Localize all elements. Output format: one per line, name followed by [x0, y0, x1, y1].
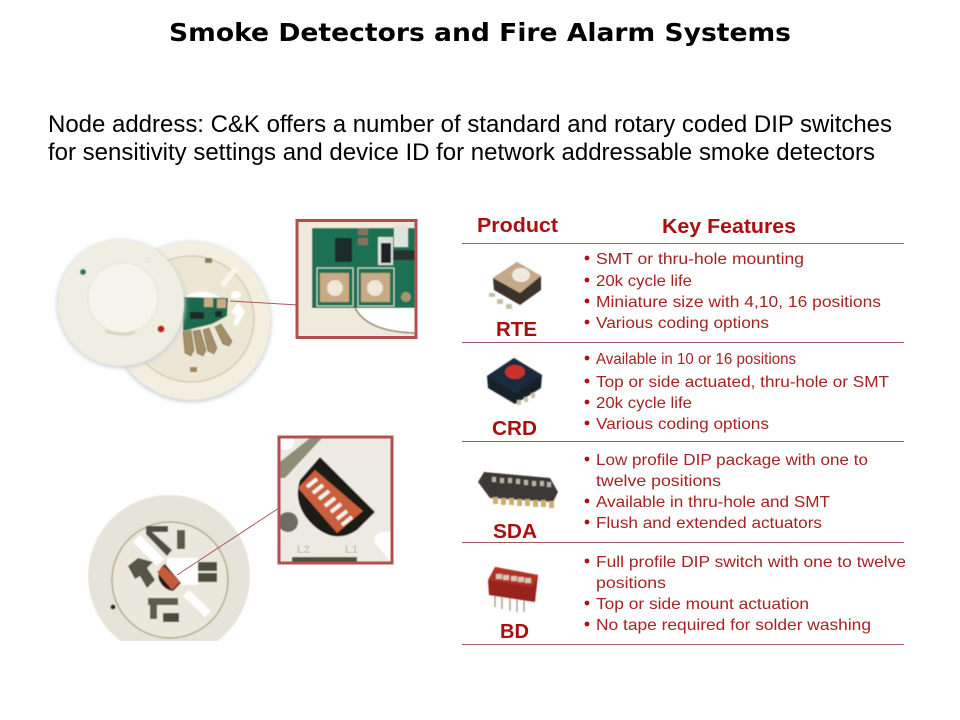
row: CRD: [487, 351, 890, 440]
features: RTE: Various coding options: [596, 315, 769, 332]
features: RTE: Miniature size with 4,10, 16 positions: [596, 294, 881, 311]
features: SDA: Flush and extended actuators: [596, 515, 822, 532]
row: RTE: [489, 251, 881, 341]
slots: [133, 535, 164, 566]
zoom inset 2: DIP switch: L1: [345, 544, 358, 556]
intro text: for sensitivity settings and device ID for network addressable smoke detectors: [48, 139, 875, 166]
base ring: [111, 242, 271, 402]
zoom inset 2: DIP switch: [278, 434, 392, 563]
circuit board: [183, 297, 228, 331]
icon: BD switch: [488, 567, 538, 612]
features: BD: positions: [596, 575, 666, 592]
icon: RTE switch: [489, 262, 541, 309]
features: SDA: [585, 452, 868, 532]
leader line 1: [230, 301, 298, 305]
title: Smoke Detectors and Fire Alarm Systems: [169, 18, 791, 47]
intro text: Node address: C&K offers a number of standard and rotary coded DIP switches: [48, 111, 892, 138]
photo: open smoke detector: [57, 240, 271, 402]
terminals: [146, 526, 172, 556]
table headers: [477, 214, 796, 238]
table row rules: [462, 244, 904, 644]
features: RTE: SMT or thru-hole mounting: [596, 251, 804, 268]
features: BD: Full profile DIP switch with one to twelve: [596, 554, 906, 571]
features: CRD: Various coding options: [596, 416, 769, 433]
label: RTE: RTE: [496, 318, 537, 341]
label: BD: BD: [500, 620, 529, 643]
features: RTE: [585, 251, 881, 332]
table headers: Key Features: [662, 215, 796, 238]
features: BD: Top or side mount actuation: [596, 596, 809, 613]
terminals: [183, 324, 232, 356]
zoom inset 1: rotary switches on board: [297, 220, 416, 338]
table headers: Product: [477, 214, 558, 237]
label: SDA: SDA: [493, 520, 537, 543]
features: RTE: 20k cycle life: [596, 273, 692, 290]
row: SDA: [478, 452, 868, 543]
icon: CRD switch: [487, 358, 542, 405]
features: BD: No tape required for solder washing: [596, 617, 871, 634]
inset labels: L2: [297, 544, 310, 556]
row: BD: [488, 554, 906, 643]
label: CRD: CRD: [492, 417, 537, 440]
icon: SDA switch: [478, 472, 558, 508]
cover: [57, 240, 185, 368]
features: SDA: twelve positions: [596, 473, 721, 490]
intro text: [48, 111, 892, 166]
features: CRD: Top or side actuated, thru-hole or SMT: [596, 374, 890, 391]
features: CRD: 20k cycle life: [596, 395, 692, 412]
features: SDA: Low profile DIP package with one to: [596, 452, 868, 469]
features: CRD: Available in 10 or 16 positions: [596, 351, 796, 368]
features: CRD: [585, 351, 890, 433]
photo: detector base: [88, 495, 250, 657]
leader line 2: [177, 508, 279, 575]
features: BD: [585, 554, 906, 634]
features: SDA: Available in thru-hole and SMT: [596, 494, 831, 511]
